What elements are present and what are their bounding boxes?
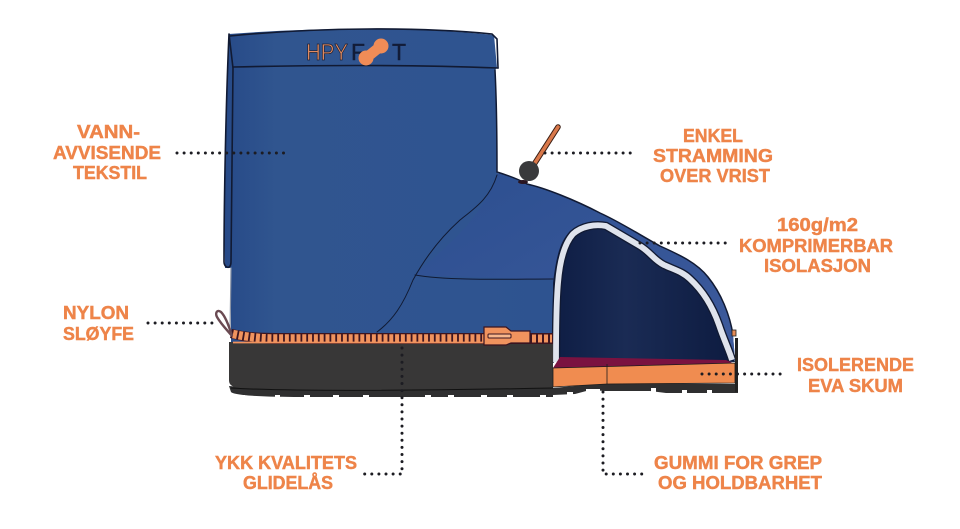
- foot panel: [415, 173, 735, 360]
- callout: water-repellent textile: VANN-: [77, 122, 140, 142]
- callout: insulation: ISOLASJON: [764, 256, 871, 276]
- callout: insulation: KOMPRIMERBAR: [739, 236, 893, 256]
- callout: EVA foam: [797, 355, 914, 396]
- zipper: [230, 327, 553, 345]
- callout: rubber sole: [654, 453, 822, 493]
- callout: water-repellent textile: [53, 122, 161, 183]
- leader: ankle tightening: [545, 152, 636, 154]
- leader: rubber sole: [603, 392, 645, 474]
- logo: HPYFOOT: HPY: [306, 39, 348, 65]
- callout: ankle tightening: OVER VRIST: [660, 166, 770, 186]
- callout: insulation: [739, 215, 893, 276]
- callout: EVA foam: EVA SKUM: [808, 376, 903, 396]
- callout: YKK zipper: [215, 453, 357, 493]
- callout: EVA foam: ISOLERENDE: [797, 355, 914, 375]
- nylon loop: [216, 311, 232, 336]
- callout: water-repellent textile: TEKSTIL: [73, 163, 147, 183]
- leader: insulation: [640, 242, 731, 244]
- tread notches: [240, 388, 712, 398]
- logo: HPYFOOT: T: [392, 39, 406, 65]
- leader: nylon loop: [148, 322, 216, 324]
- magenta insole: [553, 357, 735, 368]
- callout: YKK zipper: GLIDELÅS: [243, 473, 333, 493]
- callout: ankle tightening: ENKEL: [683, 126, 743, 146]
- callout: insulation: 160g/m2: [777, 215, 858, 235]
- callout: rubber sole: GUMMI FOR GREP: [654, 453, 822, 473]
- callout: ankle tightening: STRAMMING: [653, 146, 773, 166]
- toe tab: [732, 330, 736, 336]
- callout: water-repellent textile: AVVISENDE: [53, 143, 161, 163]
- leader: YKK zipper: [358, 348, 402, 474]
- callout: nylon loop: SLØYFE: [63, 324, 134, 344]
- callout: YKK zipper: YKK KVALITETS: [215, 453, 357, 473]
- white lining trim: [556, 225, 732, 362]
- logo: HPYFOOT: F: [351, 39, 365, 65]
- toe black edge: [735, 338, 738, 392]
- black midsole: [229, 342, 553, 390]
- zipper slider: [484, 327, 530, 345]
- callout: nylon loop: [63, 303, 134, 344]
- orange EVA foam: [553, 363, 735, 387]
- illustration: boot: [216, 29, 738, 398]
- logo: HPYFOOT: [306, 38, 406, 66]
- boot upper body: [224, 29, 735, 360]
- callout: nylon loop: NYLON: [63, 303, 129, 323]
- opening interior: [553, 222, 735, 363]
- boot outline and seams: [224, 29, 733, 335]
- callout: ankle tightening: [653, 126, 773, 186]
- ankle cord with knob: [518, 127, 558, 184]
- leader: water-repellent textile: [177, 152, 288, 154]
- leader: EVA foam: [702, 372, 781, 376]
- tread outsole: [229, 383, 738, 397]
- callout: rubber sole: OG HOLDBARHET: [658, 473, 822, 493]
